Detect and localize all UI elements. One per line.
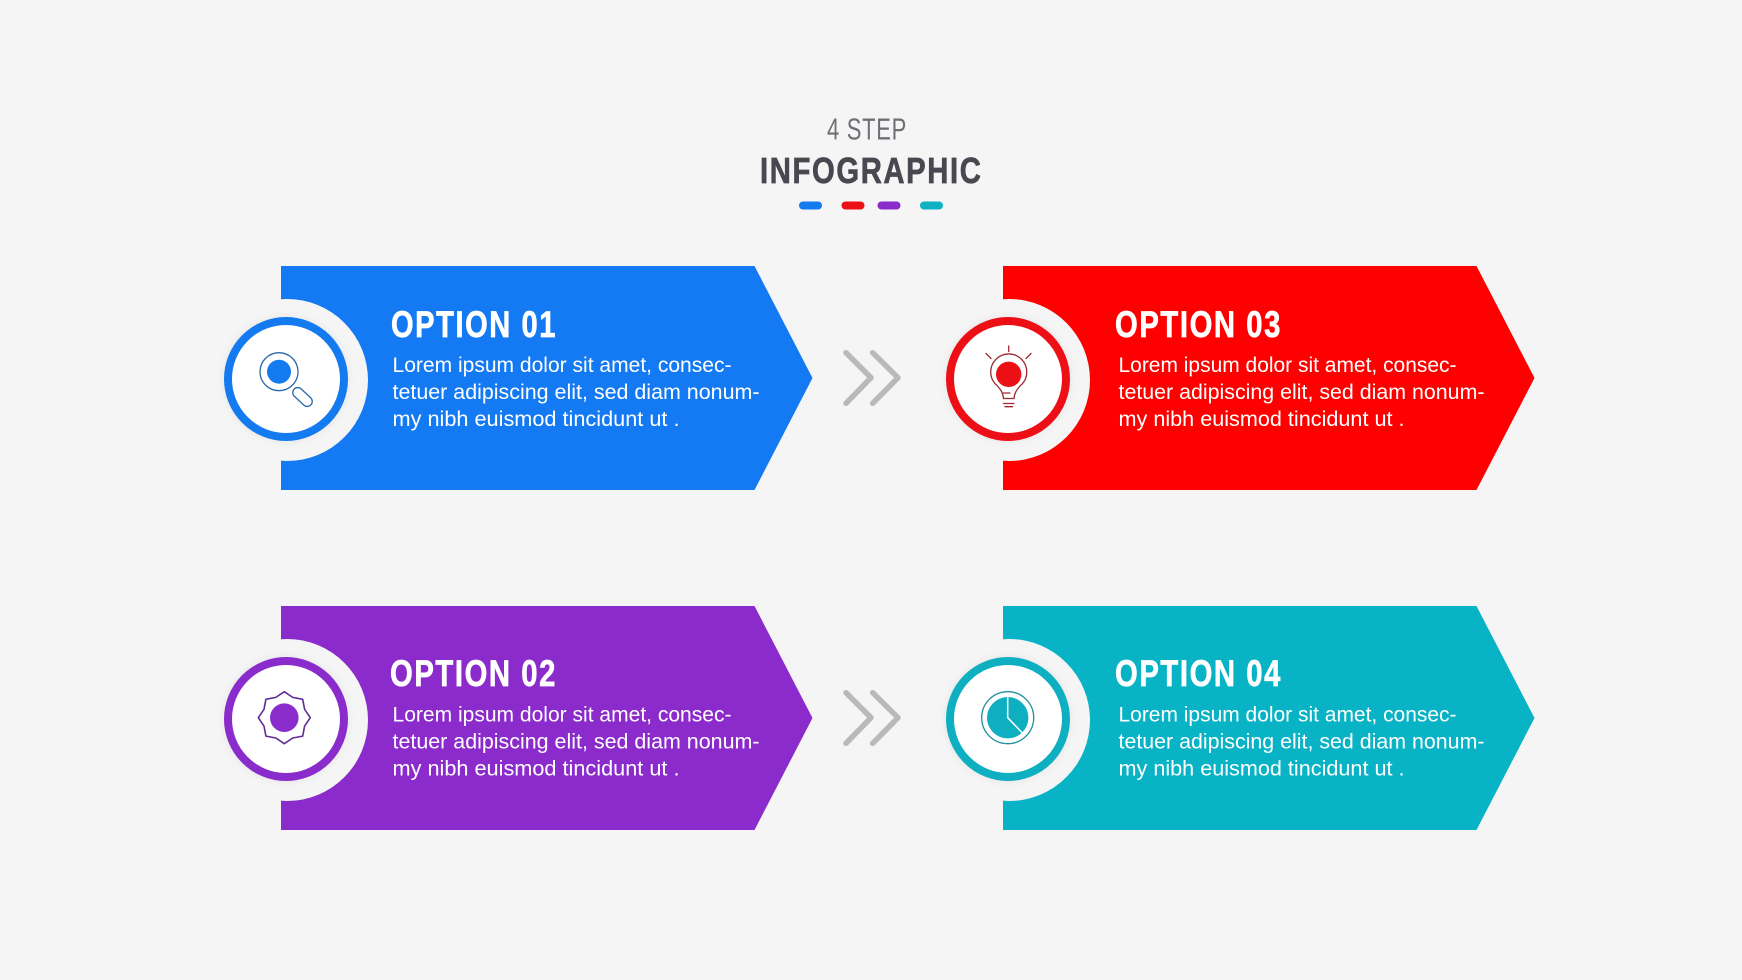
- body text: tetuer adipiscing elit, sed diam nonum-: [392, 381, 760, 404]
- title block: [760, 112, 982, 210]
- icon badge: gear: [228, 661, 344, 777]
- arrow: top row chevrons: [846, 353, 898, 403]
- body text: Lorem ipsum dolor sit amet, consec-: [392, 704, 732, 726]
- heading: OPTION 02: [390, 653, 557, 694]
- notch: [928, 299, 1090, 461]
- body text: [1118, 704, 1484, 780]
- body text: my nibh euismod tincidunt ut .: [1118, 408, 1404, 431]
- body text: [392, 704, 760, 780]
- body text: tetuer adipiscing elit, sed diam nonum-: [1118, 381, 1484, 404]
- arrow banner red: [1003, 266, 1534, 490]
- icon badge: magnifier: [228, 321, 344, 437]
- heading: INFOGRAPHIC: INFOGRAPHIC: [760, 150, 982, 191]
- subtitle: 4 STEP: 4 STEP: [827, 112, 907, 146]
- body text: my nibh euismod tincidunt ut .: [392, 408, 680, 431]
- icon badge: light bulb: [950, 321, 1066, 437]
- arrow banner purple: [281, 606, 812, 830]
- body text: Lorem ipsum dolor sit amet, consec-: [1118, 704, 1456, 726]
- body text: my nibh euismod tincidunt ut .: [392, 758, 680, 780]
- body text: [392, 354, 760, 431]
- heading: OPTION 01: [391, 304, 557, 345]
- heading: OPTION 03: [1115, 304, 1282, 345]
- body text: tetuer adipiscing elit, sed diam nonum-: [392, 730, 760, 754]
- body text: tetuer adipiscing elit, sed diam nonum-: [1118, 730, 1484, 754]
- panel: option 01: [206, 266, 812, 490]
- heading: OPTION 04: [1115, 653, 1282, 694]
- body text: Lorem ipsum dolor sit amet, consec-: [1118, 354, 1456, 377]
- notch: [206, 639, 368, 801]
- icon badge: clock: [950, 661, 1066, 777]
- notch: [206, 299, 368, 461]
- colour key dashes: [799, 202, 943, 210]
- panel: option 04: [928, 606, 1534, 830]
- body text: my nibh euismod tincidunt ut .: [1118, 758, 1404, 780]
- body text: Lorem ipsum dolor sit amet, consec-: [392, 354, 732, 377]
- body text: [1118, 354, 1484, 431]
- arrow: bottom row chevrons: [846, 693, 898, 743]
- arrow banner teal: [1003, 606, 1534, 830]
- panel: option 02: [206, 606, 812, 830]
- arrow banner blue: [281, 266, 812, 490]
- notch: [928, 639, 1090, 801]
- panel: option 03: [928, 266, 1534, 490]
